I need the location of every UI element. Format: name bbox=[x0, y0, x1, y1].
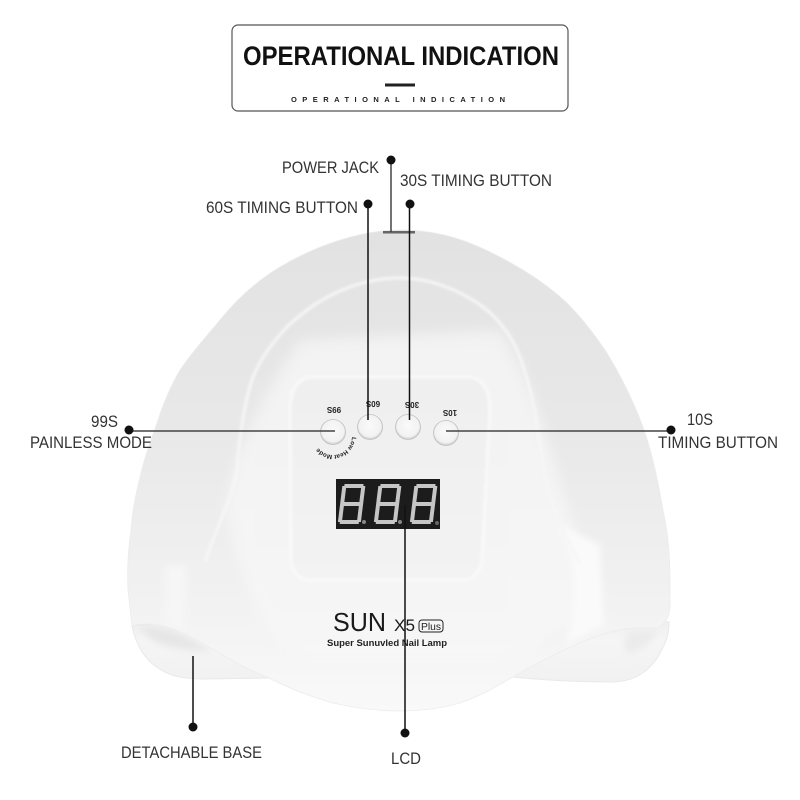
callout: LCD: LCD bbox=[391, 750, 421, 768]
callout: power jack: POWER JACK bbox=[282, 159, 379, 177]
callout: LCD bbox=[391, 505, 421, 768]
button: 10S bbox=[434, 408, 458, 446]
product logo bbox=[327, 607, 447, 649]
button: 99S: 99S bbox=[326, 405, 341, 414]
lamp body bbox=[128, 230, 670, 711]
callout: 10S timing button: TIMING BUTTON bbox=[658, 434, 778, 452]
button: 99S bbox=[320, 405, 346, 444]
callout: 30S timing button: 30S TIMING BUTTON bbox=[400, 172, 552, 190]
title box bbox=[232, 25, 568, 111]
button: 30S bbox=[396, 400, 420, 440]
title accent bar bbox=[385, 84, 415, 86]
button: 30S: 30S bbox=[404, 400, 419, 409]
outer ridge bbox=[205, 278, 580, 563]
low heat mode curved text: Low Heat Mode bbox=[316, 437, 356, 460]
panel left shadow bbox=[290, 412, 292, 556]
callout: 10S timing button bbox=[446, 411, 778, 452]
title heading: OPERATIONAL INDICATION bbox=[243, 41, 559, 71]
callout: power jack bbox=[282, 156, 396, 232]
callout: 10S timing button: 10S bbox=[687, 411, 713, 429]
button: 60S bbox=[358, 399, 382, 440]
power jack slot bbox=[383, 231, 415, 234]
callout: 60S timing button: 60S TIMING BUTTON bbox=[206, 199, 358, 217]
callout: 99S painless mode: PAINLESS MODE bbox=[30, 434, 152, 452]
product logo: X5 bbox=[394, 616, 415, 635]
callout: detachable base bbox=[121, 656, 262, 762]
callout: 99S painless mode: 99S bbox=[91, 413, 118, 431]
button: 10S: 10S bbox=[442, 408, 457, 417]
LCD display bbox=[336, 479, 440, 529]
body highlights bbox=[237, 332, 599, 614]
LCD digits bbox=[338, 484, 438, 524]
product logo: Super Sunuvled Nail Lamp bbox=[327, 638, 447, 649]
callout: 99S painless mode bbox=[30, 413, 335, 452]
product logo: SUN bbox=[333, 607, 386, 637]
callout: detachable base: DETACHABLE BASE bbox=[121, 744, 262, 762]
product logo: Plus bbox=[421, 621, 441, 633]
callout: 60S timing button bbox=[206, 199, 372, 420]
detachable base tray bbox=[132, 600, 669, 682]
title subtitle: OPERATIONAL INDICATION bbox=[291, 95, 505, 104]
inner control panel bbox=[290, 377, 490, 580]
callout: 30S timing button bbox=[400, 172, 552, 420]
nail lamp bbox=[127, 230, 670, 712]
panel frame bbox=[290, 377, 490, 580]
button: 60S: 60S bbox=[365, 399, 380, 408]
